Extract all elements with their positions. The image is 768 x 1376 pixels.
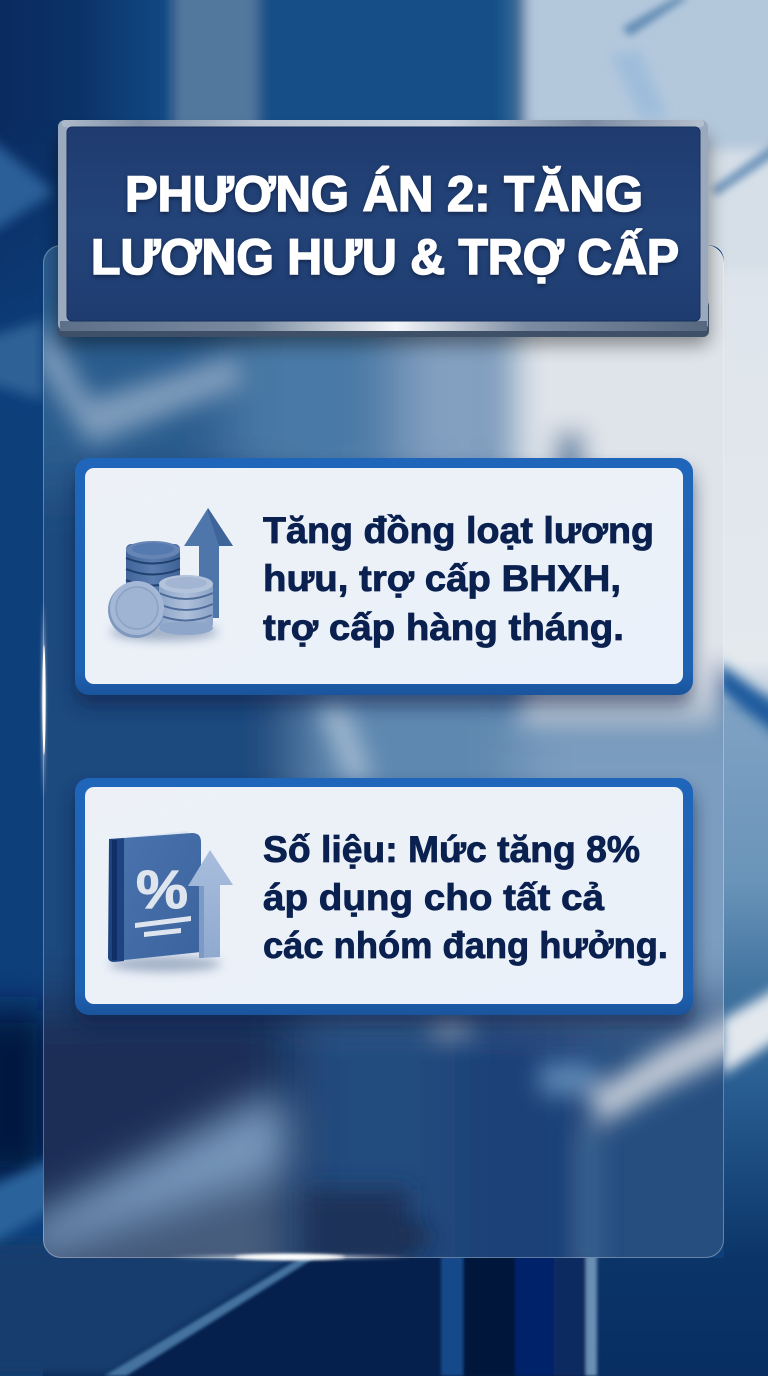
card 1 text: hưu, trợ cấp BHXH,: [263, 558, 621, 599]
icon: percent book and up arrow: [108, 831, 233, 972]
card 2 text: [263, 829, 668, 966]
card 2: [75, 778, 693, 1026]
panel: frosted glass backdrop: [39, 245, 724, 1263]
card 2 text: các nhóm đang hưởng.: [263, 925, 668, 966]
card 2 text: áp dụng cho tất cả: [263, 877, 604, 918]
glow on left panel edge: [42, 600, 46, 800]
title text: LƯƠNG HƯU & TRỢ CẤP: [91, 229, 679, 285]
icon: percent book and up arrow: %: [136, 860, 188, 920]
below the panel: [43, 1258, 596, 1376]
title text: [91, 166, 679, 285]
title plaque: [58, 120, 709, 345]
icon: coins and up arrow: [108, 508, 233, 641]
card 2 text: Số liệu: Mức tăng 8%: [263, 829, 640, 870]
card 1 text: [263, 510, 654, 648]
dark zone on left strip: [0, 1010, 50, 1180]
card 1 text: trợ cấp hàng tháng.: [263, 607, 624, 648]
card 1: [75, 458, 693, 706]
glow on bottom panel edge: [170, 1254, 410, 1260]
card 1 text: Tăng đồng loạt lương: [263, 510, 654, 551]
title text: PHƯƠNG ÁN 2: TĂNG: [125, 166, 643, 222]
